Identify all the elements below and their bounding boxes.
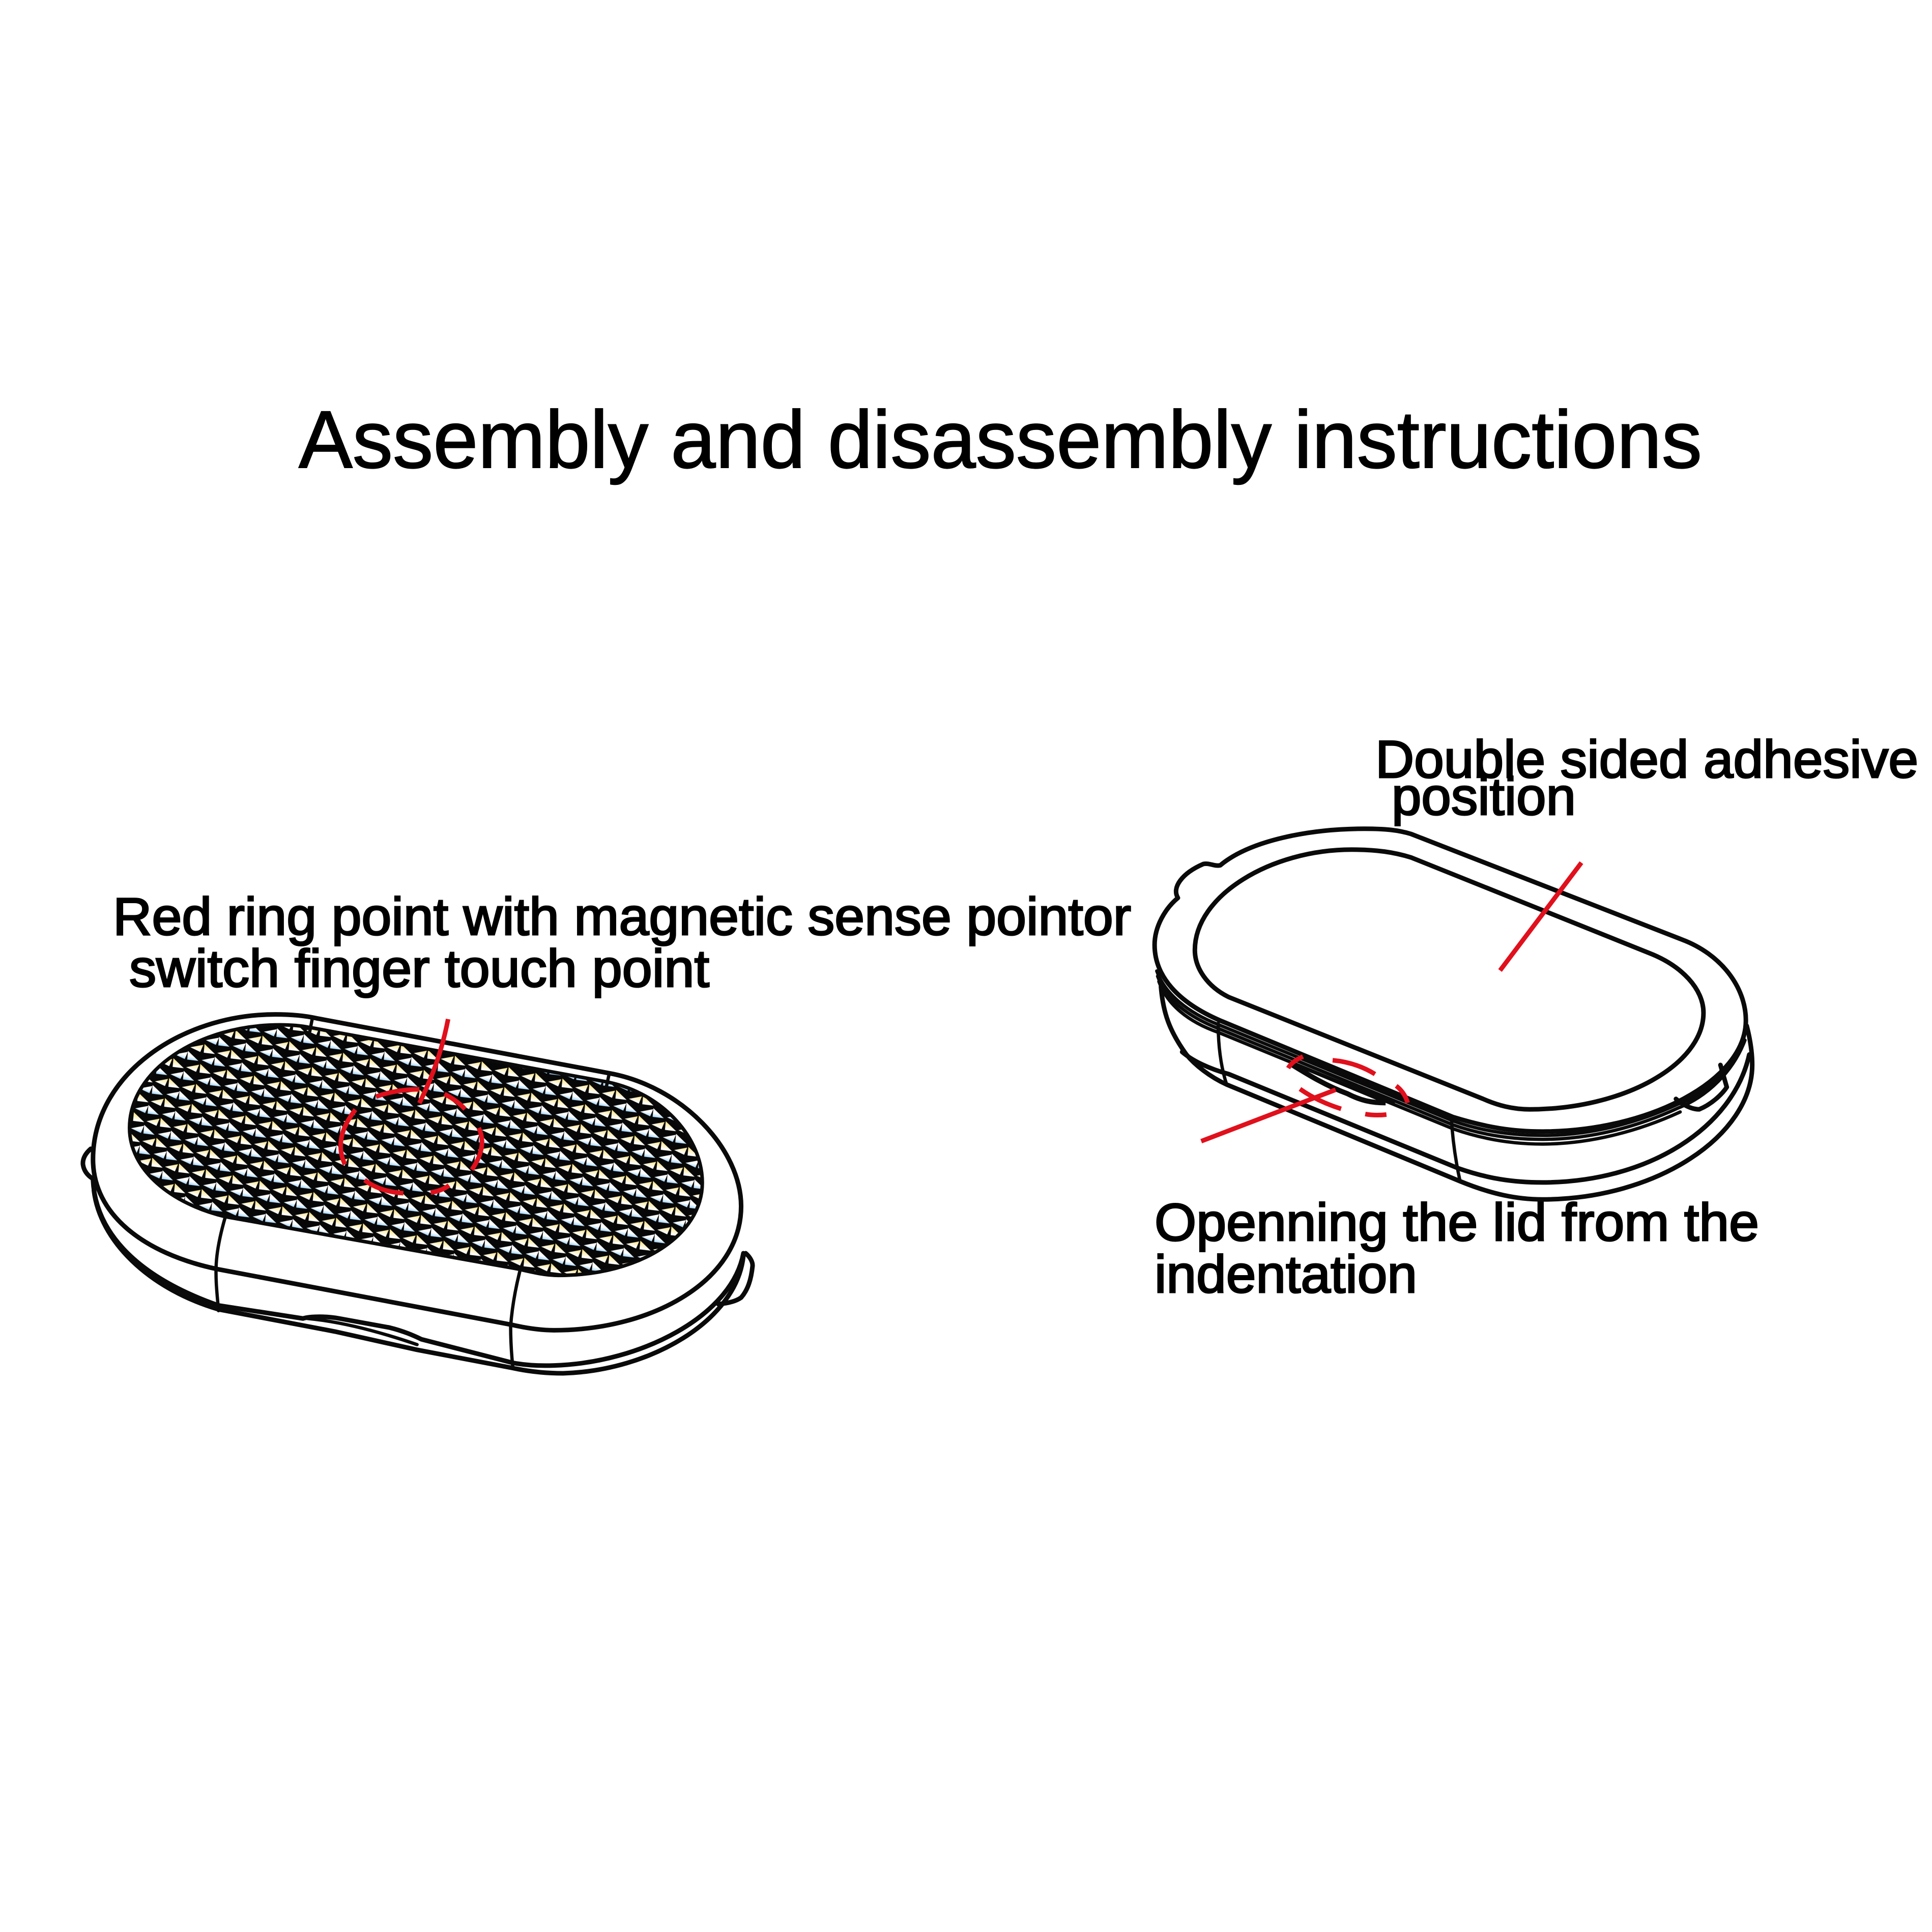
red ring (340, 1089, 482, 1193)
label: double sided adhesive: Double sided adhesive (1375, 730, 1918, 789)
label: magnetic sense pointer (113, 887, 1131, 998)
label: double sided adhesive (1375, 730, 1918, 826)
seams (1218, 1023, 1227, 1084)
title: Assembly and disassembly instructions (299, 394, 1702, 485)
label: magnetic sense pointer: switch finger touch point (129, 939, 709, 998)
side seams (216, 1217, 225, 1311)
lid outer outline (1155, 829, 1746, 1132)
label: opening the lid: Openning the lid from the (1155, 1193, 1759, 1252)
case side lines (93, 1180, 743, 1366)
label: opening the lid: indentation (1155, 1245, 1417, 1304)
label: double sided adhesive: position (1392, 767, 1576, 826)
stacked rim layers (1157, 971, 1744, 1136)
hinge tabs (83, 1149, 93, 1179)
label: opening the lid (1155, 1193, 1759, 1304)
inner adhesive ring (1195, 850, 1704, 1109)
lid outline (93, 1015, 741, 1330)
device: closed case with mesh top (83, 1015, 753, 1373)
red pointer (419, 1019, 448, 1103)
red dashed ring (1288, 1057, 1407, 1115)
case body lines (1161, 987, 1752, 1199)
indentation (1292, 1065, 1386, 1103)
mesh panel (130, 1025, 702, 1276)
label: magnetic sense pointer: Red ring point with magnetic sense pointor (113, 887, 1131, 946)
device: open case with adhesive area (1155, 829, 1752, 1199)
red adhesive pointer (1500, 862, 1581, 970)
red indentation pointer (1201, 1090, 1336, 1141)
